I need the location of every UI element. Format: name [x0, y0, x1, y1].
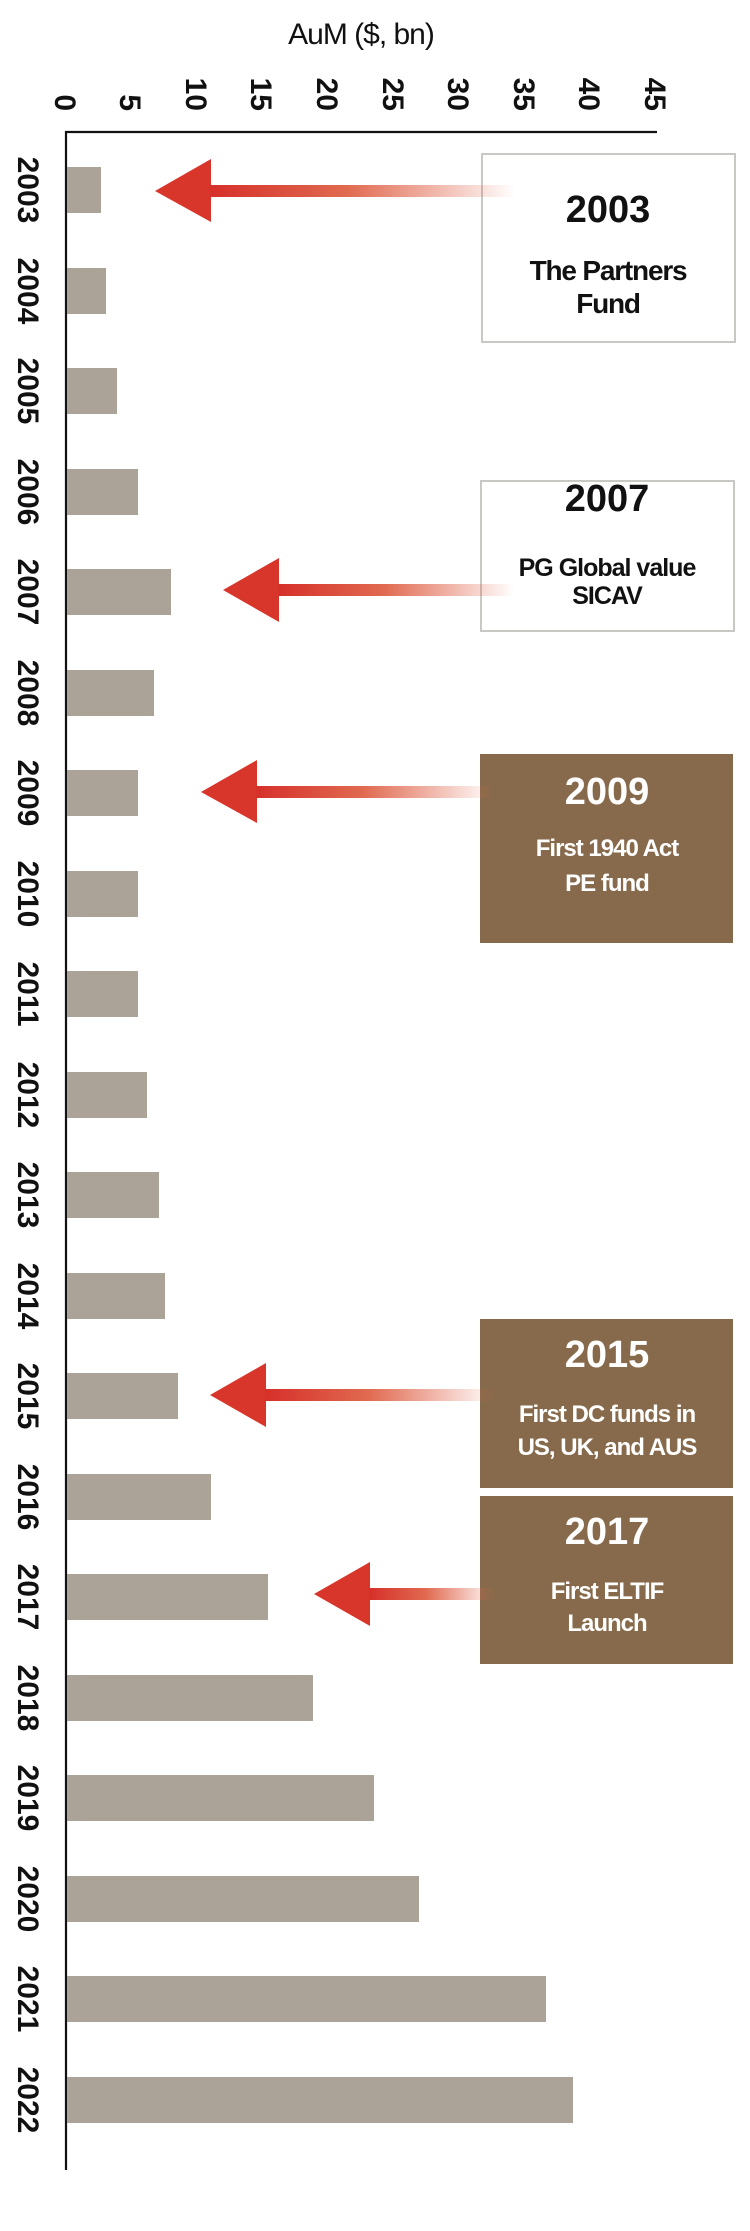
- year labels: [11, 157, 44, 2133]
- arrow: 2015: [210, 1363, 495, 1427]
- callout: 2009: PE fund: [565, 870, 649, 897]
- x axis tick labels: 5: [113, 94, 146, 111]
- year labels: 2011: [11, 961, 44, 1027]
- year labels: 2009: [11, 760, 44, 826]
- x axis tick labels: 15: [244, 78, 277, 111]
- callout: 2017: 2017: [565, 1511, 649, 1553]
- year labels: 2016: [11, 1464, 44, 1530]
- x axis tick labels: 30: [441, 78, 474, 111]
- year labels: 2014: [11, 1263, 44, 1330]
- x axis tick labels: 45: [638, 78, 671, 111]
- year labels: 2012: [11, 1062, 44, 1128]
- arrow: 2003: [155, 159, 515, 222]
- year labels: 2008: [11, 660, 44, 726]
- year labels: 2017: [11, 1564, 44, 1630]
- bars: [67, 167, 573, 2123]
- callout: 2007: PG Global value: [519, 554, 696, 582]
- year labels: 2021: [11, 1966, 44, 2032]
- x axis tick labels: 20: [310, 78, 343, 111]
- callout: 2017: Launch: [567, 1610, 647, 1637]
- year labels: 2018: [11, 1665, 44, 1731]
- callout: 2009: [480, 754, 733, 943]
- callout: 2015: [480, 1319, 733, 1488]
- year labels: 2013: [11, 1162, 44, 1228]
- callout: 2009: First 1940 Act: [536, 835, 679, 862]
- arrow: 2009: [201, 760, 494, 823]
- year labels: 2010: [11, 861, 44, 927]
- x axis tick labels: 35: [507, 78, 540, 111]
- year labels: 2006: [11, 459, 44, 525]
- callout: 2009: 2009: [565, 771, 649, 813]
- callout: 2007: SICAV: [572, 582, 643, 610]
- callout: 2003: The Partners: [530, 255, 687, 286]
- callout: 2017: First ELTIF: [551, 1578, 664, 1605]
- callout: 2015: First DC funds in: [519, 1401, 696, 1428]
- callout: 2007: 2007: [565, 478, 649, 520]
- year labels: 2022: [11, 2067, 44, 2133]
- callout: 2003: [482, 154, 735, 342]
- x axis tick labels: 40: [572, 78, 605, 111]
- year labels: 2020: [11, 1866, 44, 1932]
- year labels: 2015: [11, 1363, 44, 1429]
- year labels: 2003: [11, 157, 44, 223]
- x axis tick labels: 10: [179, 78, 212, 111]
- callout: 2007: [481, 478, 734, 631]
- x axis tick labels: 25: [376, 78, 409, 111]
- callout: 2015: US, UK, and AUS: [518, 1434, 697, 1461]
- callout: 2003: Fund: [576, 288, 640, 319]
- callout: 2015: 2015: [565, 1334, 649, 1376]
- year labels: 2004: [11, 258, 44, 325]
- arrow: 2007: [223, 558, 514, 622]
- callout: 2003: 2003: [566, 189, 650, 231]
- x axis tick labels: 0: [48, 94, 81, 111]
- callout: 2017: [480, 1496, 733, 1664]
- axis title: AuM ($, bn): [288, 18, 434, 51]
- axes: [65, 131, 657, 2170]
- year labels: 2019: [11, 1765, 44, 1831]
- year labels: 2007: [11, 559, 44, 625]
- arrow: 2017: [314, 1562, 495, 1626]
- year labels: 2005: [11, 358, 44, 424]
- x axis tick labels: [48, 78, 671, 111]
